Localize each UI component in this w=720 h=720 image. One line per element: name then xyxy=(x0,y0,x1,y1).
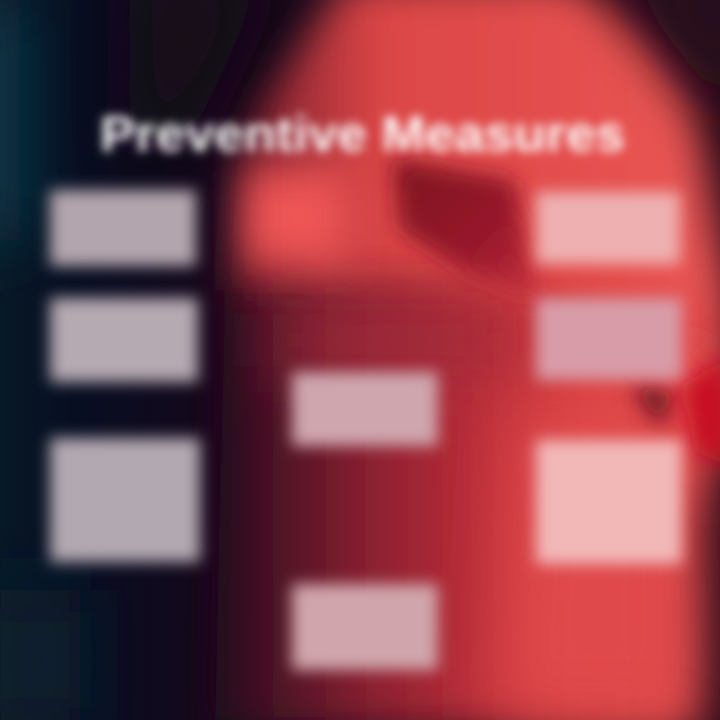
teal glow on left edge xyxy=(0,0,80,720)
dark shadow fold xyxy=(392,158,535,295)
info box: right column, row 1 xyxy=(536,192,680,264)
info box: left column, row 1 xyxy=(50,190,196,266)
info box: centre column, row 1 xyxy=(292,372,438,446)
info box: right column, row 3 xyxy=(536,440,682,564)
info box: right column, row 2 xyxy=(536,298,682,380)
lower body sheen xyxy=(280,310,690,720)
red figure silhouette xyxy=(215,0,720,720)
info box: left column, row 3 xyxy=(50,438,200,562)
chest highlight xyxy=(245,170,350,265)
deep red accent at right edge xyxy=(630,355,720,470)
title: Preventive Measures xyxy=(100,106,625,162)
info box: centre column, row 2 xyxy=(292,584,438,670)
dark upper corner xyxy=(130,0,720,170)
info box: left column, row 2 xyxy=(50,298,198,382)
